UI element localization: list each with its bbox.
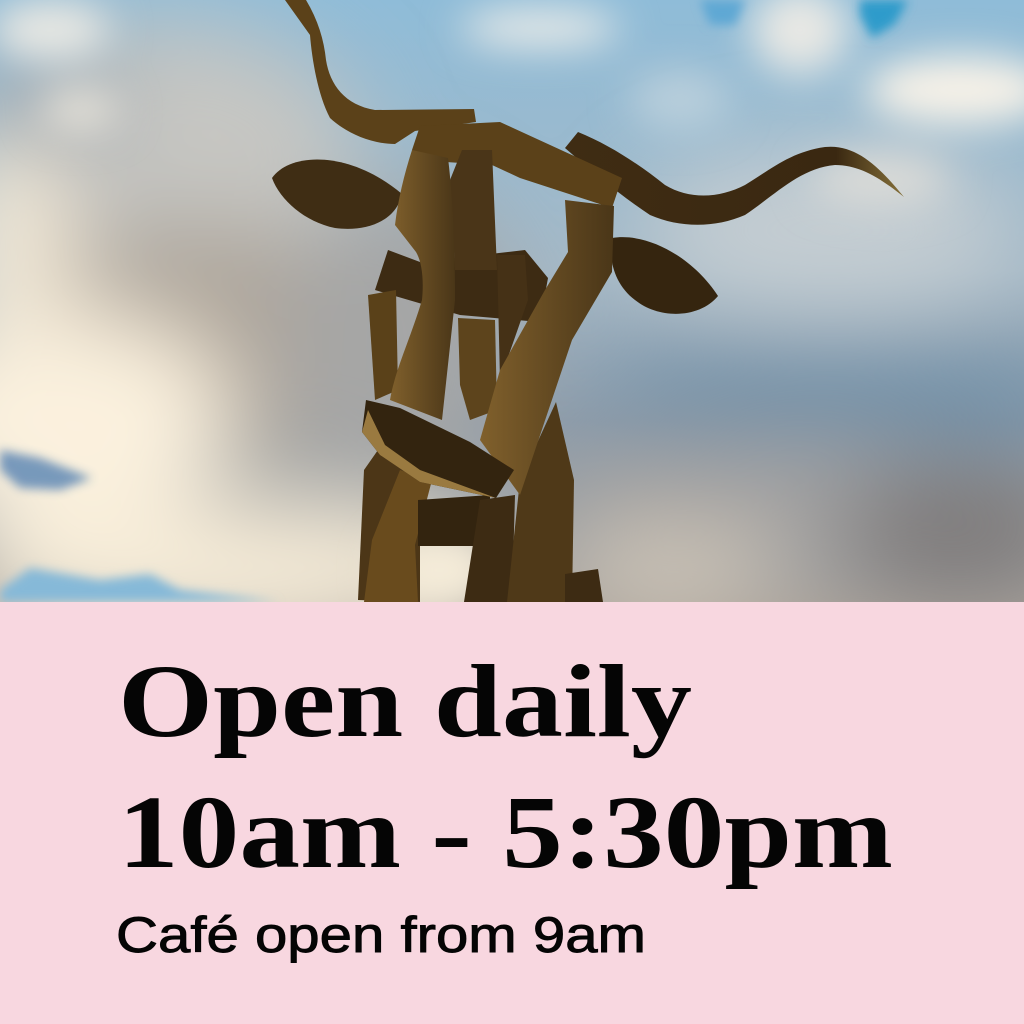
right horn xyxy=(565,132,904,225)
left ear xyxy=(272,159,402,229)
forehead beam xyxy=(412,122,622,208)
heading: hours: 10am - 5:30pm xyxy=(118,775,893,890)
panel: opening hours xyxy=(0,602,1024,1024)
left horn xyxy=(285,0,476,144)
right ear xyxy=(611,237,718,314)
heading: open daily: Open daily xyxy=(118,644,692,759)
back beams xyxy=(375,250,548,322)
left front post xyxy=(390,150,455,420)
right front post xyxy=(480,200,614,495)
sky background xyxy=(0,0,1024,640)
muzzle xyxy=(362,400,514,498)
legs xyxy=(358,440,420,602)
sculpture: wooden bull xyxy=(272,0,904,602)
text: cafe hours: Café open from 9am xyxy=(116,907,646,963)
photo: wooden longhorn bull sculpture against a cloudy sky xyxy=(0,0,1024,602)
